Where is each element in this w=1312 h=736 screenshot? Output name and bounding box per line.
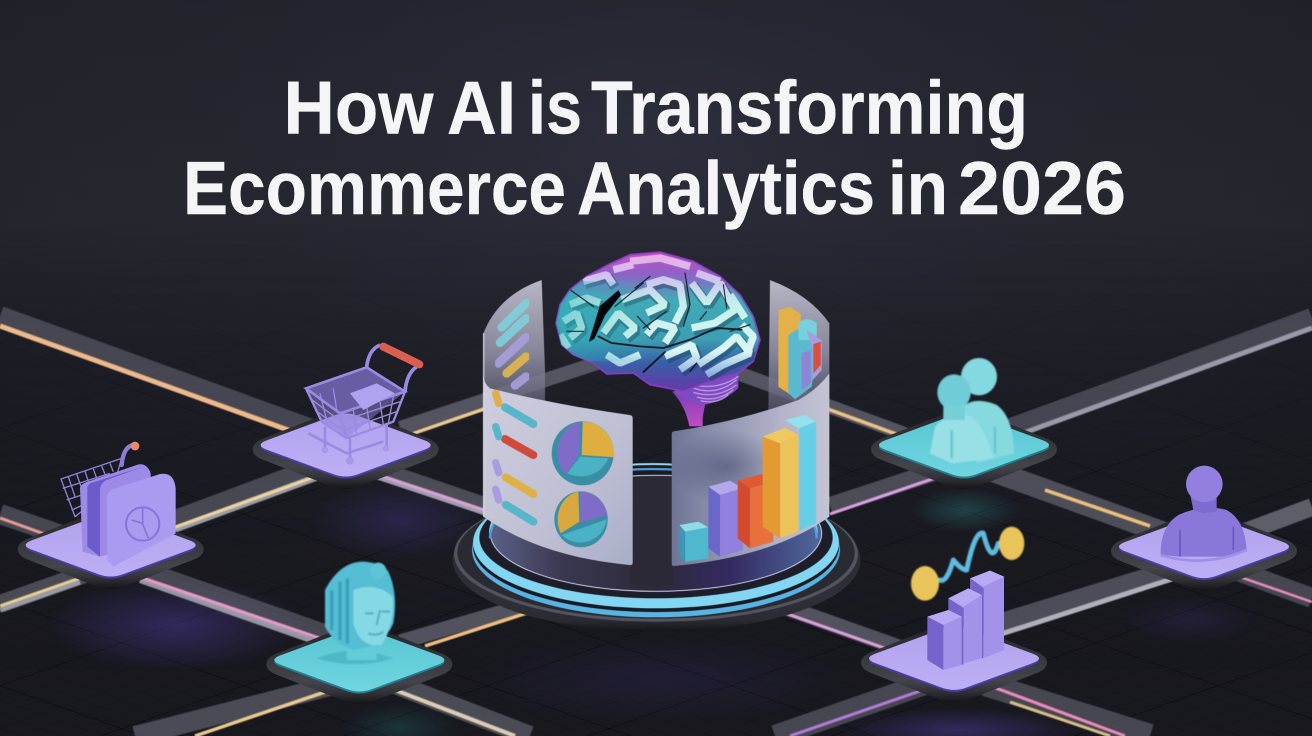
bar: purple bbox=[708, 481, 743, 557]
rail: people to person bbox=[990, 470, 1170, 535]
central hub bbox=[453, 252, 861, 632]
bar: yellow bbox=[763, 428, 798, 538]
title line 1: Transforming bbox=[591, 66, 1028, 150]
tile bbox=[1111, 511, 1297, 591]
rail: cards to edge bbox=[0, 574, 85, 610]
icon: stacked cards with clock bbox=[80, 464, 176, 567]
rail: cards to cart bbox=[170, 466, 320, 531]
title bbox=[183, 66, 1126, 230]
brain stem and cerebellum bbox=[672, 373, 738, 426]
brain creases bbox=[567, 273, 750, 372]
icon: rising bars bbox=[927, 571, 1004, 670]
inner ring bbox=[490, 464, 817, 585]
rail: head lower right bbox=[395, 684, 530, 736]
rear right bar chart bbox=[778, 307, 822, 399]
rail: people to hub bbox=[735, 372, 915, 441]
rail: head lower left bbox=[135, 686, 330, 736]
rail: cart to hub bbox=[400, 362, 600, 438]
tile bbox=[871, 409, 1057, 489]
node: shopping cart bbox=[253, 345, 439, 489]
node: people group bbox=[871, 358, 1057, 489]
rear right glass panel bbox=[768, 280, 829, 413]
rail: people to hub lower bbox=[830, 470, 940, 514]
icon: shopping cart bbox=[306, 345, 419, 464]
title line 1 bbox=[284, 66, 1028, 150]
rail: cart to hub lower bbox=[370, 467, 490, 514]
tile bbox=[266, 624, 452, 704]
rear left glass panel bbox=[483, 280, 545, 413]
platform base bbox=[453, 475, 861, 632]
rail: upper right bbox=[1000, 318, 1312, 438]
brain gyri bbox=[550, 258, 753, 377]
tile bbox=[861, 622, 1047, 702]
rear left list strips bbox=[498, 303, 526, 385]
icon: person bust bbox=[1161, 466, 1247, 561]
rail: bars to person bbox=[995, 568, 1180, 636]
brain bbox=[550, 252, 760, 426]
node: growth bars bbox=[861, 527, 1047, 702]
tile bbox=[18, 509, 204, 589]
rail: bars lower left bbox=[775, 684, 925, 736]
brain body bbox=[556, 252, 760, 391]
icon: shopping basket bbox=[61, 442, 139, 517]
node: person bbox=[1111, 466, 1297, 591]
list rows bbox=[496, 393, 533, 522]
rail: hub to bars bbox=[782, 606, 900, 650]
front right glass panel bbox=[670, 373, 829, 566]
bar: orange bbox=[738, 474, 773, 548]
rail: cards to head bbox=[140, 570, 330, 645]
title line 2: Analytics bbox=[577, 146, 875, 230]
icon: two people bbox=[930, 358, 1014, 463]
rail: person to edge upper bbox=[1245, 507, 1312, 532]
bar: cyan tall bbox=[785, 415, 816, 531]
title line 1: How bbox=[284, 66, 434, 150]
node: customer head bbox=[266, 562, 452, 704]
rail: bars lower right bbox=[985, 684, 1150, 736]
pie chart 2 bbox=[554, 491, 608, 547]
front left glass panel bbox=[483, 333, 633, 565]
icon: trend line and coins bbox=[911, 527, 1024, 601]
title line 2: Ecommerce bbox=[183, 146, 566, 230]
floor grid bbox=[0, 304, 1312, 736]
title line 2: 2026 bbox=[958, 146, 1126, 230]
tile bbox=[253, 409, 439, 489]
rail: person to edge lower bbox=[1235, 570, 1312, 602]
rail: left edge bbox=[0, 514, 70, 538]
rail: head to hub bbox=[400, 604, 530, 646]
node: cards and cart bbox=[18, 442, 204, 589]
title line 1: is bbox=[528, 66, 582, 150]
icon: head bust bbox=[317, 562, 395, 664]
title line 2 bbox=[183, 146, 1126, 230]
title line 2: in bbox=[888, 146, 948, 230]
rail: upper left bbox=[0, 316, 320, 438]
pie chart 1 bbox=[552, 421, 614, 485]
glass edge bbox=[481, 333, 486, 517]
title line 1: AI bbox=[447, 66, 516, 150]
connector rails bbox=[0, 316, 1312, 736]
bar chart bbox=[679, 415, 816, 562]
bar: teal short bbox=[679, 522, 708, 562]
